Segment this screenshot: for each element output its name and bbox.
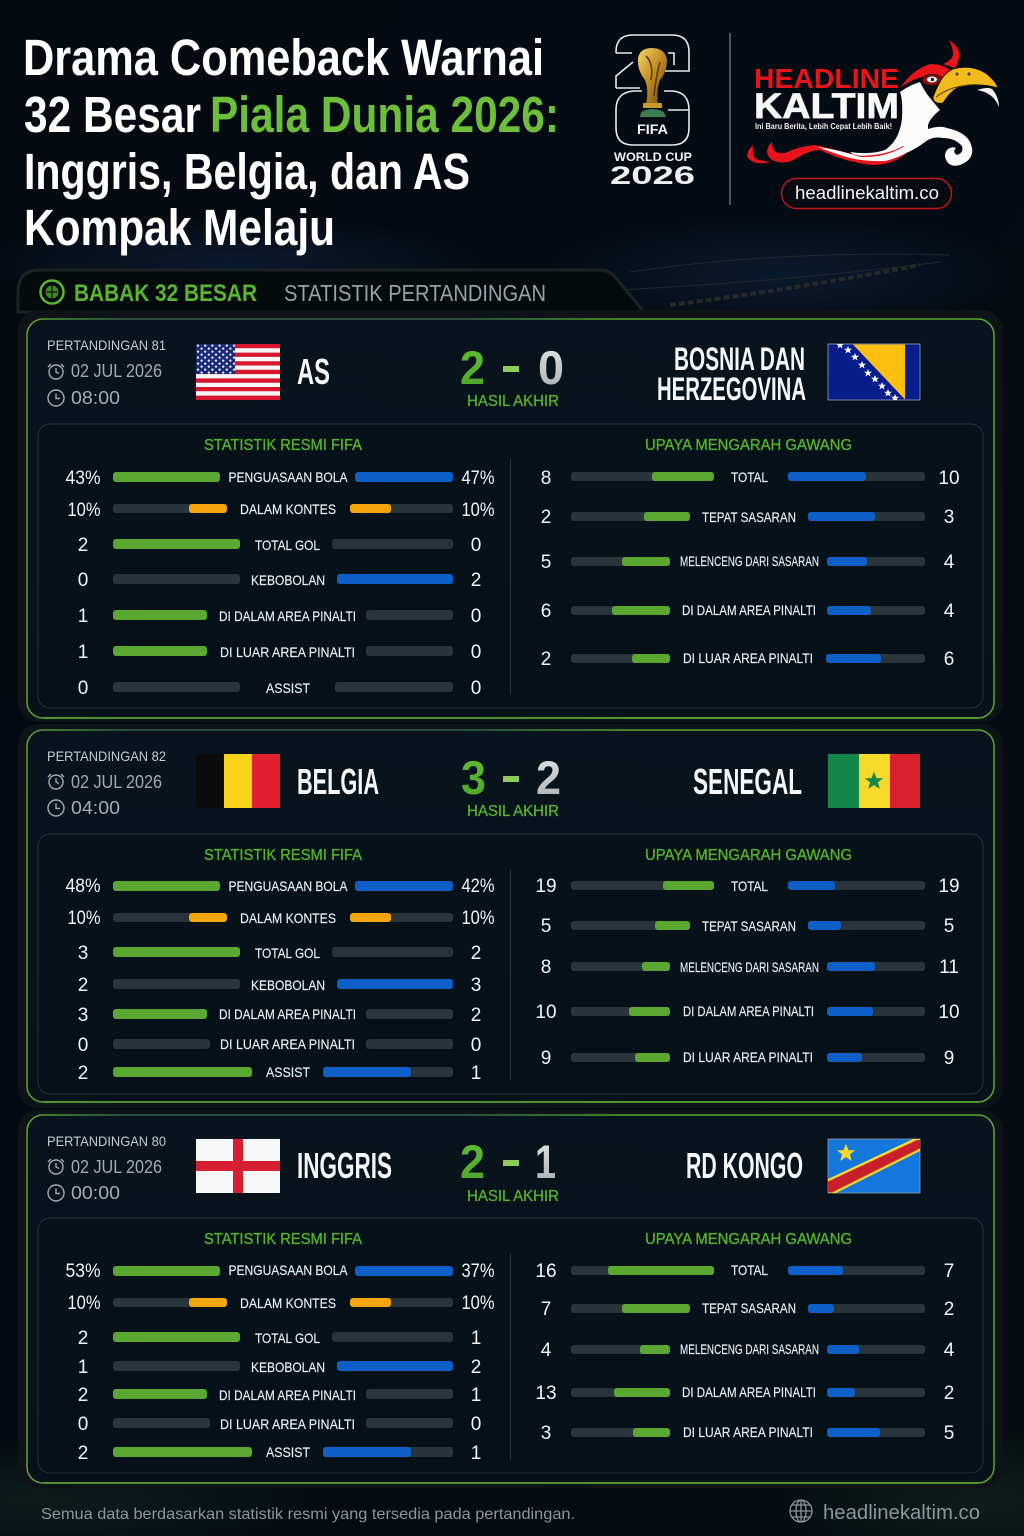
chart: shots: TOTAL [731, 878, 768, 894]
flag: England [196, 1139, 280, 1193]
chart: FIFA stats: 1 [471, 1443, 481, 1464]
match info: PERTANDINGAN 81 [47, 337, 166, 353]
icon: football badge [40, 280, 64, 304]
logo: Headline Kaltim [747, 40, 999, 166]
chart: FIFA stats: 10% [462, 908, 495, 929]
score: 2 [536, 751, 561, 804]
chart: shots: 5 [944, 916, 954, 937]
team: Inggris: INGGRIS [297, 1145, 392, 1186]
chart: FIFA stats: TOTAL GOL [255, 537, 320, 553]
chart: shots: DI DALAM AREA PINALTI [682, 1384, 816, 1400]
chart: shots: 10 [535, 1002, 557, 1023]
chart: shots: 9 [541, 1048, 551, 1069]
chart: FIFA stats: DI DALAM AREA PINALTI [219, 1387, 356, 1403]
team: RD Kongo: RD KONGO [686, 1145, 803, 1186]
chart: shots: 5 [541, 916, 551, 937]
chart: FIFA stats [66, 876, 495, 1084]
chart: FIFA stats: DI LUAR AREA PINALTI [220, 1416, 355, 1432]
heading: FIFA stats: STATISTIK RESMI FIFA [204, 847, 362, 864]
chart: FIFA stats: DALAM KONTES [240, 501, 336, 517]
chart: shots: 4 [944, 552, 955, 573]
chart: shots: 13 [535, 1383, 557, 1404]
score: 2 [460, 1135, 485, 1188]
title [23, 29, 559, 256]
section header: Babak 32 Besar: BABAK 32 BESAR [74, 280, 257, 307]
chart: shots: 9 [944, 1048, 954, 1069]
chart: FIFA stats: 0 [78, 1035, 88, 1056]
heading: FIFA stats: STATISTIK RESMI FIFA [204, 1231, 362, 1248]
flag: USA [196, 344, 280, 400]
match info [47, 337, 166, 408]
chart: shots: 4 [541, 1340, 552, 1361]
panel: stats [38, 424, 983, 708]
score: 3 [461, 751, 486, 804]
team: Belgia: BELGIA [297, 761, 379, 802]
score: 1 [535, 1135, 556, 1188]
match info: 02 JUL 2026 [71, 361, 162, 381]
chart: shots: 5 [541, 552, 551, 573]
chart: shots [535, 876, 960, 1069]
flag: Belgium [196, 754, 280, 808]
match info: 02 JUL 2026 [71, 1157, 162, 1177]
team: Bosnia dan Herzegovina [657, 341, 806, 407]
chart: FIFA stats: DI LUAR AREA PINALTI [220, 644, 355, 660]
chart: FIFA stats: 3 [78, 1005, 88, 1026]
score [460, 341, 564, 410]
chart: FIFA stats: TOTAL GOL [255, 945, 320, 961]
title: Kompak Melaju [24, 199, 335, 256]
chart: shots: TEPAT SASARAN [702, 918, 796, 934]
chart: FIFA stats: 1 [471, 1385, 481, 1406]
chart: FIFA stats: KEBOBOLAN [251, 572, 325, 588]
heading: shots: UPAYA MENGARAH GAWANG [645, 847, 852, 864]
team: Bosnia dan Herzegovina: HERZEGOVINA [657, 371, 806, 407]
chart: shots [535, 1261, 955, 1444]
chart: shots: 16 [535, 1261, 557, 1282]
chart: FIFA stats: 42% [462, 876, 495, 897]
chart: FIFA stats: 1 [78, 606, 88, 627]
chart: FIFA stats: DI DALAM AREA PINALTI [219, 1006, 356, 1022]
chart: FIFA stats: 1 [78, 642, 88, 663]
match info: 08:00 [71, 388, 120, 408]
chart: shots: 2 [944, 1299, 954, 1320]
chart: FIFA stats: 0 [471, 642, 481, 663]
flag: Bosnia [828, 341, 920, 401]
chart: FIFA stats: 2 [471, 1005, 481, 1026]
match info [47, 748, 166, 818]
chart: FIFA stats: KEBOBOLAN [251, 1359, 325, 1375]
score: 2 [460, 341, 485, 394]
chart: shots: 6 [944, 649, 954, 670]
chart: FIFA stats: 0 [471, 1414, 481, 1435]
chart: FIFA stats: 37% [462, 1261, 495, 1282]
chart: shots: MELENCENG DARI SASARAN [680, 553, 819, 569]
chart: shots: 19 [938, 876, 960, 897]
chart: shots: 6 [541, 601, 551, 622]
chart: shots: DI LUAR AREA PINALTI [683, 1424, 813, 1440]
chart: shots: DI DALAM AREA PINALTI [682, 602, 816, 618]
chart: FIFA stats: 2 [471, 943, 481, 964]
chart: shots: 4 [944, 1340, 955, 1361]
chart: FIFA stats: ASSIST [266, 1064, 310, 1080]
chart: FIFA stats: 0 [471, 678, 481, 699]
chart: FIFA stats: 2 [471, 1357, 481, 1378]
chart: FIFA stats: 2 [78, 975, 88, 996]
chart: shots: TOTAL [731, 469, 768, 485]
chart: FIFA stats: ASSIST [266, 1444, 310, 1460]
chart: FIFA stats: 2 [78, 1443, 88, 1464]
footer website: headlinekaltim.co [823, 1502, 980, 1524]
chart: shots: 2 [541, 507, 551, 528]
chart: shots: DI DALAM AREA PINALTI [683, 1003, 814, 1019]
heading: FIFA stats: STATISTIK RESMI FIFA [204, 437, 362, 454]
chart: FIFA stats: PENGUASAAN BOLA [228, 469, 348, 485]
chart: shots: 19 [535, 876, 557, 897]
chart: shots: 11 [939, 957, 959, 978]
chart: shots: MELENCENG DARI SASARAN [680, 1341, 819, 1357]
chart: shots: 10 [938, 468, 960, 489]
logo: FIFA World Cup 2026: WORLD CUP [614, 150, 692, 164]
chart: FIFA stats: 1 [471, 1328, 481, 1349]
chart: shots: 7 [944, 1261, 954, 1282]
panel: stats [38, 834, 983, 1094]
chart: FIFA stats: 10% [68, 1293, 101, 1314]
heading: shots: UPAYA MENGARAH GAWANG [645, 1231, 852, 1248]
title: Piala Dunia 2026: [210, 86, 559, 143]
chart: shots: 7 [541, 1299, 551, 1320]
chart: FIFA stats: 10% [68, 908, 101, 929]
chart: FIFA stats: ASSIST [266, 680, 310, 696]
score: HASIL AKHIR [467, 1188, 559, 1205]
chart: FIFA stats: 47% [462, 468, 495, 489]
chart: FIFA stats: 3 [78, 943, 88, 964]
chart: FIFA stats: PENGUASAAN BOLA [228, 878, 348, 894]
logo: Headline Kaltim: Ini Baru Berita, Lebih Cepat Lebih Baik! [755, 121, 892, 131]
chart: FIFA stats: 2 [78, 1063, 88, 1084]
logo: FIFA World Cup 2026: 2026 [610, 162, 695, 190]
flag: Senegal [828, 754, 920, 808]
match info [47, 1133, 166, 1203]
chart: FIFA stats [66, 1261, 495, 1464]
chart: shots: TEPAT SASARAN [702, 1300, 796, 1316]
chart: FIFA stats: 2 [471, 570, 481, 591]
score [460, 1135, 559, 1205]
chart: FIFA stats: 0 [471, 535, 481, 556]
icon: globe [790, 1500, 812, 1522]
chart: FIFA stats: 2 [78, 535, 88, 556]
chart: FIFA stats: 10% [462, 1293, 495, 1314]
title: Drama Comeback Warnai [23, 29, 544, 86]
chart: FIFA stats: 0 [471, 606, 481, 627]
panel: match 82 [18, 724, 1003, 1108]
chart: FIFA stats: 0 [471, 1035, 481, 1056]
team: Senegal: SENEGAL [693, 761, 802, 802]
chart: shots: TOTAL [731, 1262, 768, 1278]
match info: PERTANDINGAN 82 [47, 748, 166, 764]
chart: FIFA stats: 3 [471, 975, 481, 996]
chart: shots: 10 [938, 1002, 960, 1023]
chart: shots: 2 [541, 649, 551, 670]
chart: shots: 8 [541, 957, 551, 978]
score: 0 [538, 341, 564, 394]
chart: FIFA stats [66, 468, 495, 699]
chart: FIFA stats: KEBOBOLAN [251, 977, 325, 993]
panel: stats [38, 1218, 983, 1473]
title: 32 Besar [24, 86, 201, 143]
section header: Babak 32 Besar: STATISTIK PERTANDINGAN [284, 280, 546, 306]
chart: shots: 2 [944, 1383, 954, 1404]
logo: Headline Kaltim: HEADLINE [754, 63, 899, 94]
chart: FIFA stats: 53% [66, 1261, 101, 1282]
score: HASIL AKHIR [467, 393, 559, 410]
match info: PERTANDINGAN 80 [47, 1133, 166, 1149]
chart: shots: 8 [541, 468, 551, 489]
title: Inggris, Belgia, dan AS [24, 143, 470, 200]
footer note: Semua data berdasarkan statistik resmi yang tersedia pada pertandingan. [41, 1506, 575, 1523]
chart: FIFA stats: TOTAL GOL [255, 1330, 320, 1346]
chart: shots: 3 [944, 507, 954, 528]
chart: FIFA stats: DI LUAR AREA PINALTI [220, 1036, 355, 1052]
chart: shots [541, 468, 960, 670]
chart: shots: 4 [944, 601, 955, 622]
section header: Babak 32 Besar [18, 270, 644, 312]
panel: match 81 [18, 310, 1003, 722]
chart: FIFA stats: DI DALAM AREA PINALTI [219, 608, 356, 624]
chart: shots: TEPAT SASARAN [702, 509, 796, 525]
chart: shots: 5 [944, 1423, 954, 1444]
match info: 04:00 [71, 798, 120, 818]
team: Bosnia dan Herzegovina: BOSNIA DAN [674, 341, 805, 377]
chart: FIFA stats: 2 [78, 1328, 88, 1349]
chart: FIFA stats: DALAM KONTES [240, 1295, 336, 1311]
panel: match 80 [18, 1110, 1003, 1488]
match info: 00:00 [71, 1183, 120, 1203]
chart: FIFA stats: 0 [78, 678, 88, 699]
score [461, 751, 561, 820]
logo: FIFA World Cup 2026: FIFA [637, 121, 668, 137]
logo: FIFA World Cup 2026 [610, 35, 695, 190]
chart: FIFA stats: 43% [66, 468, 101, 489]
chart: FIFA stats: 0 [78, 1414, 88, 1435]
match info: 02 JUL 2026 [71, 772, 162, 792]
team: AS: AS [297, 351, 330, 392]
logo: Headline Kaltim: KALTIM [754, 87, 899, 126]
chart: FIFA stats: 0 [78, 570, 88, 591]
chart: shots: MELENCENG DARI SASARAN [680, 959, 819, 975]
chart: FIFA stats: 2 [78, 1385, 88, 1406]
website pill [782, 178, 952, 208]
website pill: headlinekaltim.co [795, 182, 939, 203]
chart: FIFA stats: 10% [462, 500, 495, 521]
chart: FIFA stats: 1 [471, 1063, 481, 1084]
heading: shots: UPAYA MENGARAH GAWANG [645, 437, 852, 454]
chart: FIFA stats: 1 [78, 1357, 88, 1378]
chart: shots: DI LUAR AREA PINALTI [683, 1049, 813, 1065]
chart: shots: 3 [541, 1423, 551, 1444]
score: HASIL AKHIR [467, 803, 559, 820]
chart: shots: DI LUAR AREA PINALTI [683, 650, 813, 666]
flag: DR Congo [828, 1139, 920, 1193]
chart: FIFA stats: 10% [68, 500, 101, 521]
chart: FIFA stats: PENGUASAAN BOLA [228, 1262, 348, 1278]
chart: FIFA stats: 48% [66, 876, 101, 897]
chart: FIFA stats: DALAM KONTES [240, 910, 336, 926]
